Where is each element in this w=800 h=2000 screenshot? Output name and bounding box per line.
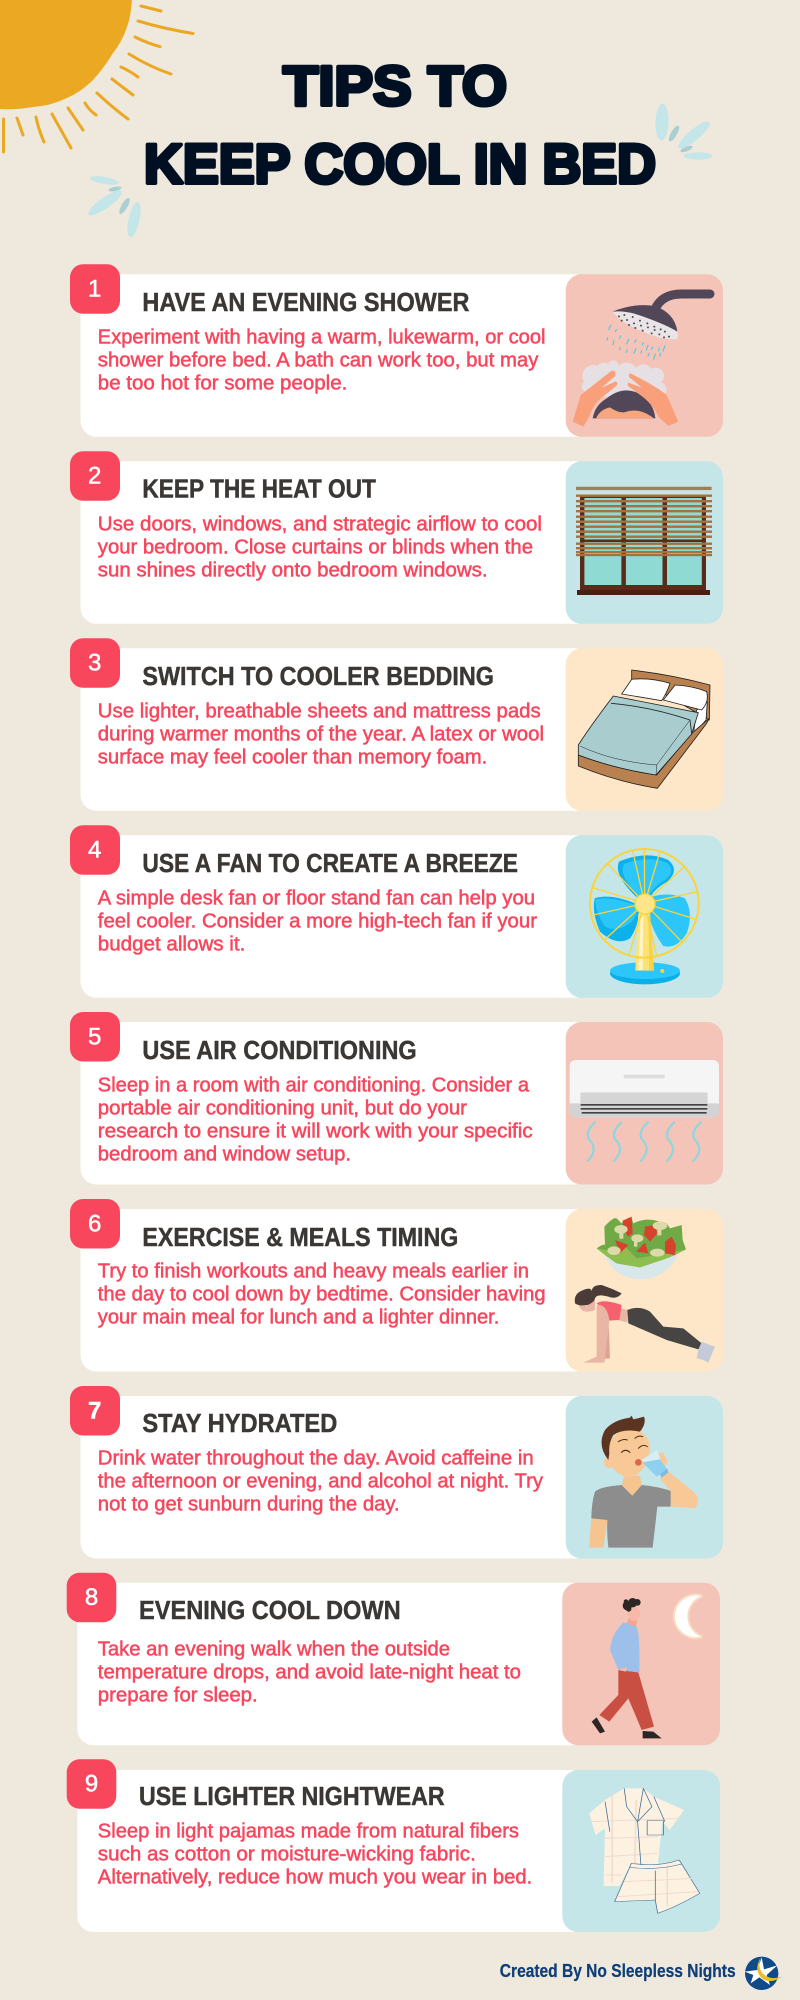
body text	[98, 326, 546, 394]
body text: portable air conditioning unit, but do your	[98, 1097, 467, 1119]
step number badge	[70, 1386, 120, 1436]
step number badge: 1	[88, 276, 101, 303]
heading: SWITCH TO COOLER BEDDING	[142, 663, 494, 691]
panel: tip 4 fan	[70, 825, 723, 998]
body text: your bedroom. Close curtains or blinds when the	[98, 536, 533, 558]
body text: Drink water throughout the day. Avoid caffeine in	[98, 1447, 534, 1469]
image tile: shower	[566, 274, 723, 437]
body text: A simple desk fan or floor stand fan can help you	[98, 887, 535, 909]
step number badge	[70, 638, 120, 688]
body text: Use lighter, breathable sheets and mattress pads	[98, 700, 541, 722]
body text	[98, 1260, 546, 1328]
panel: tip 2 heat out	[70, 451, 723, 624]
body text: Use doors, windows, and strategic airflow to cool	[98, 513, 542, 535]
image tile: air conditioner	[566, 1022, 723, 1184]
heading: KEEP THE HEAT OUT	[142, 476, 376, 504]
step number badge	[67, 1759, 116, 1809]
step number badge: 5	[88, 1023, 101, 1050]
body text: the day to cool down by bedtime. Consider having	[98, 1283, 546, 1305]
body text: temperature drops, and avoid late-night heat to	[98, 1661, 521, 1683]
step number badge: 6	[88, 1210, 101, 1237]
title	[144, 54, 656, 195]
image tile: man drinking water	[566, 1396, 723, 1558]
panel: tip 3 cooler bedding	[70, 638, 723, 811]
title: TIPS TO	[283, 54, 507, 117]
body text: Experiment with having a warm, lukewarm, or cool	[98, 326, 546, 348]
image tile: salad and workout	[566, 1209, 723, 1372]
image tile: man walking at night	[562, 1583, 720, 1745]
panel: tip 9 lighter nightwear	[67, 1759, 720, 1932]
heading: USE LIGHTER NIGHTWEAR	[139, 1783, 445, 1811]
image tile: fan	[566, 835, 723, 998]
heading: EXERCISE & MEALS TIMING	[142, 1224, 458, 1252]
heading: EVENING COOL DOWN	[139, 1597, 401, 1625]
body text: be too hot for some people.	[98, 372, 347, 394]
body text	[98, 700, 544, 768]
panel: tip 6 exercise and meals	[70, 1199, 723, 1372]
step number badge	[70, 1012, 120, 1062]
icon: water splash right	[655, 103, 713, 160]
step number badge: 3	[88, 650, 101, 677]
panel: tip 5 air conditioning	[70, 1012, 723, 1184]
heading: USE AIR CONDITIONING	[142, 1037, 417, 1065]
panel: tip 8 evening cool down	[67, 1573, 720, 1745]
image tile: window with blinds	[566, 461, 723, 624]
body text: bedroom and window setup.	[98, 1143, 351, 1165]
icon: sun	[0, 0, 193, 152]
body text: research to ensure it will work with your specific	[98, 1120, 533, 1142]
panel: tip 7 hydrated	[70, 1386, 723, 1558]
image tile: pajamas	[562, 1770, 720, 1932]
body text: such as cotton or moisture-wicking fabric.	[98, 1844, 476, 1866]
body text: surface may feel cooler than memory foam.	[98, 746, 487, 768]
icon: no sleepless nights logo	[745, 1957, 782, 1990]
body text: Sleep in light pajamas made from natural fibers	[98, 1821, 519, 1843]
body text: Take an evening walk when the outside	[98, 1638, 450, 1660]
icon: water splash left	[85, 174, 143, 238]
body text: not to get sunburn during the day.	[98, 1493, 400, 1515]
body text	[98, 1447, 543, 1515]
step number badge	[70, 451, 120, 501]
step number badge	[70, 264, 120, 314]
panel: tip 1 evening shower	[70, 264, 723, 437]
body text: Alternatively, reduce how much you wear in bed.	[98, 1867, 532, 1889]
heading: HAVE AN EVENING SHOWER	[142, 289, 469, 317]
image tile: bed	[566, 648, 723, 811]
body text: the afternoon or evening, and alcohol at night. Try	[98, 1470, 543, 1492]
body text	[98, 1638, 521, 1706]
step number badge: 9	[85, 1771, 98, 1798]
step number badge	[70, 825, 120, 875]
step number badge: 4	[88, 837, 101, 864]
step number badge: 8	[85, 1584, 98, 1611]
body text	[98, 513, 542, 581]
body text: shower before bed. A bath can work too, but may	[98, 349, 538, 371]
step number badge: 7	[88, 1397, 101, 1424]
body text: your main meal for lunch and a lighter dinner.	[98, 1306, 499, 1328]
heading: USE A FAN TO CREATE A BREEZE	[142, 850, 518, 878]
step number badge: 2	[88, 463, 101, 490]
step number badge	[67, 1573, 116, 1622]
step number badge	[70, 1199, 120, 1248]
credit line: Created By No Sleepless Nights	[500, 1961, 736, 1981]
body text: budget allows it.	[98, 933, 245, 955]
heading: STAY HYDRATED	[142, 1410, 337, 1438]
body text	[98, 1074, 533, 1165]
body text: sun shines directly onto bedroom windows.	[98, 559, 488, 581]
body text	[98, 887, 537, 955]
body text: feel cooler. Consider a more high-tech fan if your	[98, 910, 537, 932]
body text: prepare for sleep.	[98, 1684, 258, 1706]
body text: Try to finish workouts and heavy meals earlier in	[98, 1260, 529, 1282]
body text	[98, 1821, 532, 1889]
body text: Sleep in a room with air conditioning. Consider a	[98, 1074, 530, 1096]
title: KEEP COOL IN BED	[144, 132, 656, 195]
body text: during warmer months of the year. A latex or wool	[98, 723, 544, 745]
